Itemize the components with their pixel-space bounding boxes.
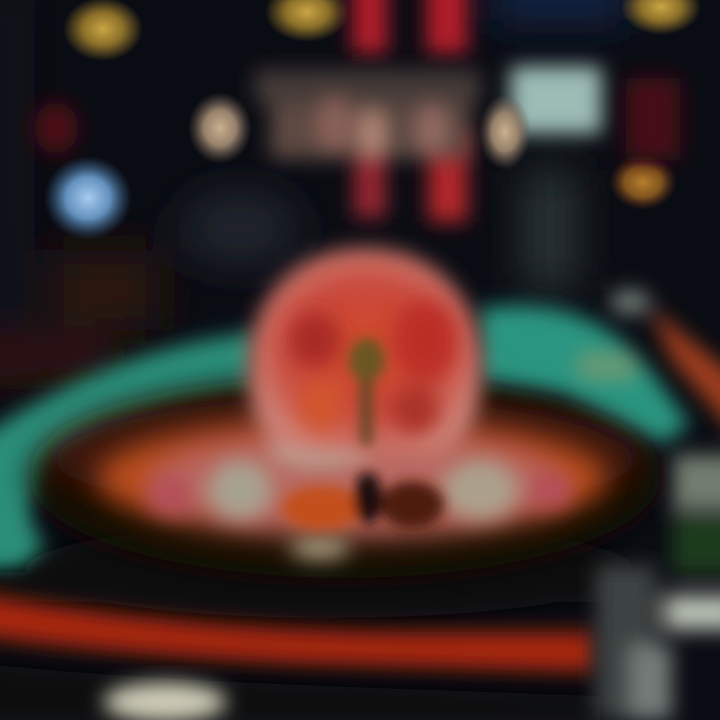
pale screen — [510, 66, 602, 134]
wheel centre hub — [282, 472, 444, 530]
red table edge band — [0, 592, 595, 672]
green table — [0, 306, 690, 580]
right side objects — [596, 290, 720, 720]
lower black table base — [0, 522, 635, 618]
dark red banner — [626, 78, 680, 160]
dome red petals — [289, 300, 457, 434]
wheel rim — [30, 378, 660, 578]
glass dome — [248, 248, 482, 452]
sign end lights — [188, 92, 531, 170]
white object bottom — [103, 682, 227, 720]
roulette wheel — [30, 378, 660, 578]
blue glowing panel — [44, 156, 132, 240]
wheel pocket ring — [97, 418, 607, 538]
red vertical stripes — [352, 0, 468, 222]
dome centre spindle — [349, 338, 385, 445]
blurred sign — [255, 70, 480, 161]
background: dark room — [0, 0, 630, 375]
wheel pale pockets — [148, 432, 572, 560]
ceiling lights — [34, 0, 701, 210]
bottom dark strip — [0, 662, 600, 720]
